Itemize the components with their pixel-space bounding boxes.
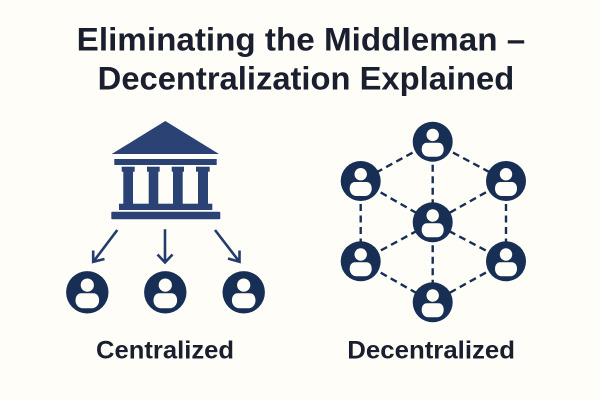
network nodes	[341, 122, 526, 322]
label: centralized: Centralized	[96, 336, 234, 364]
title: Decentralization Explained	[98, 60, 514, 96]
panel: decentralized	[341, 122, 526, 364]
title	[77, 22, 525, 96]
arrows: institution to users	[93, 229, 240, 262]
icon: bank building	[111, 121, 220, 219]
users: centralized	[66, 271, 265, 313]
label: decentralized: Decentralized	[347, 336, 515, 364]
title: Eliminating the Middleman –	[77, 22, 525, 58]
network links	[361, 142, 506, 302]
panel: centralized	[66, 121, 265, 364]
